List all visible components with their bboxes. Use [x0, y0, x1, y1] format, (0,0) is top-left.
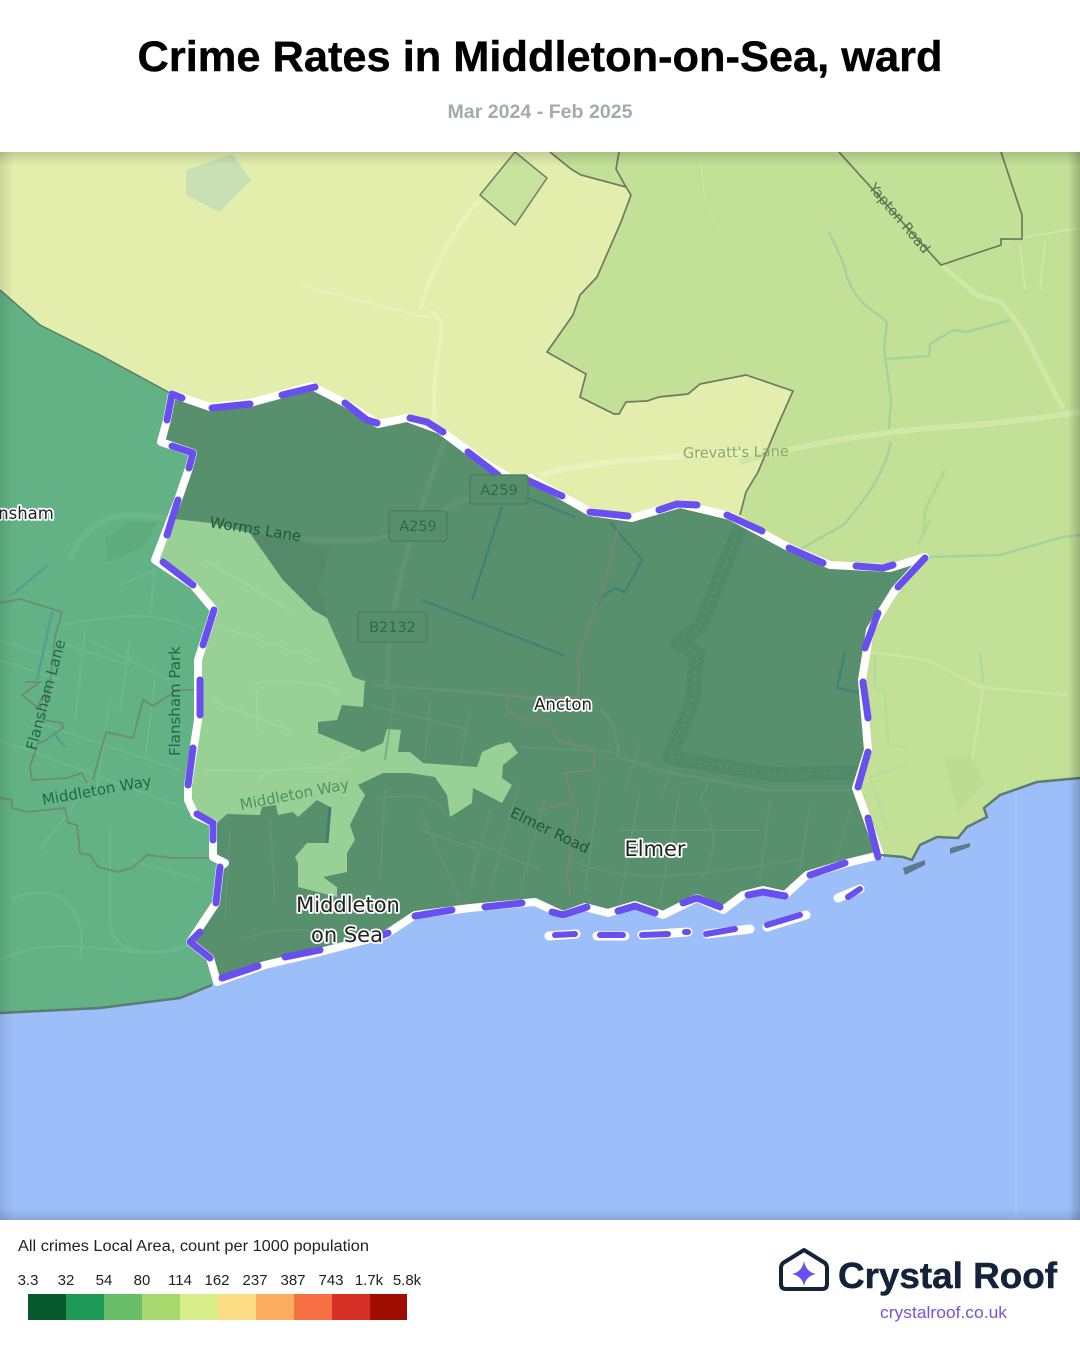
- map: ward lower-crime area: [155, 519, 518, 897]
- icon: house: [781, 1250, 827, 1289]
- legend colour scale: [28, 1294, 407, 1320]
- map: faint tile seam in sea: [1016, 790, 1017, 1220]
- legend value labels: 32: [58, 1272, 74, 1289]
- ward boundary: purple dashes: [163, 387, 925, 978]
- map: road labels: Middleton Way: [238, 775, 351, 814]
- map: rocks off coast: [903, 843, 970, 875]
- map: ward lower-area streets: [205, 560, 360, 780]
- map: road labels: Flansham Lane: [22, 638, 69, 752]
- legend value labels: 743: [318, 1272, 344, 1289]
- map: offshore dashed boundary: [549, 889, 860, 936]
- ward boundary: white line: [155, 386, 925, 982]
- map: darker patch inside ward: [250, 534, 318, 612]
- map: road labels: Yapton Road: [864, 180, 933, 257]
- map: south-east fields: [870, 651, 1067, 760]
- legend value labels: 1.7k: [355, 1272, 384, 1289]
- map: place labels: Ancton: [534, 695, 592, 714]
- legend value labels: 3.3: [18, 1272, 38, 1289]
- map: road labels: Worms Lane: [208, 513, 303, 545]
- map: place labels: Middleton: [296, 893, 400, 917]
- subtitle: date range: Mar 2024 - Feb 2025: [448, 102, 633, 123]
- logo: Crystal Roof: [781, 1250, 1058, 1322]
- map: coastline: [0, 290, 1080, 1013]
- map: west green park patch: [106, 522, 157, 562]
- map: ward boundary: [155, 386, 925, 982]
- map: place labels: [0, 504, 686, 947]
- map: road labels: Elmer Road: [507, 803, 592, 857]
- map: place labels: Elmer: [624, 837, 686, 861]
- map: ward shape high-crime area: [155, 386, 925, 982]
- map: ward parish boundaries: [507, 520, 620, 895]
- map: place labels: on Sea: [311, 923, 383, 947]
- map: north yellow area: [0, 152, 792, 522]
- legend value labels: 54: [96, 1272, 112, 1289]
- legend value labels: 5.8k: [393, 1272, 422, 1289]
- legend value labels: 237: [242, 1272, 268, 1289]
- map: green-yellow boundary lines: [547, 152, 1022, 515]
- map: yellow-area roads: [300, 200, 750, 475]
- icon: star: [792, 1261, 816, 1286]
- logo wordmark: Crystal Roof: [838, 1255, 1058, 1296]
- map: road shields: B2132: [369, 620, 416, 636]
- map: west parish boundaries: [0, 599, 210, 872]
- map: east streams: [801, 232, 1080, 830]
- map: road labels: Flansham Park: [166, 646, 184, 756]
- legend: [18, 1238, 422, 1320]
- title: Crime Rates in Middleton-on-Sea, ward: [138, 33, 942, 81]
- map: ward water ditches: [327, 498, 860, 843]
- legend value labels: 114: [168, 1272, 192, 1289]
- map: road shields: A259: [480, 483, 518, 499]
- map: west water: [12, 565, 65, 747]
- legend value labels: 162: [204, 1272, 230, 1289]
- map: road labels: Middleton Way: [41, 772, 153, 809]
- map: road shields: [358, 475, 528, 642]
- map: west road network: [0, 515, 200, 960]
- map: road shields: A259: [399, 519, 437, 535]
- map panel: [0, 152, 1080, 1220]
- map: east green area: [547, 152, 1080, 860]
- map: north-east roads: [739, 227, 1080, 465]
- map: west green area: [0, 290, 230, 1013]
- map: edge fade: [0, 152, 1080, 1220]
- map: small wood: [186, 154, 251, 212]
- legend value labels: [18, 1272, 422, 1289]
- legend value labels: 387: [280, 1272, 306, 1289]
- legend title: All crimes Local Area, count per 1000 population: [18, 1238, 369, 1255]
- map: road labels: Grevatt's Lane: [683, 444, 789, 462]
- legend value labels: 80: [134, 1272, 150, 1289]
- map: north yellow boxed field: [480, 152, 547, 225]
- map: road labels: [22, 180, 933, 857]
- map: ward streets: [384, 729, 390, 760]
- map: sea: [0, 779, 1080, 1220]
- logo url: crystalroof.co.uk: [880, 1303, 1008, 1322]
- map: field track: [671, 527, 832, 776]
